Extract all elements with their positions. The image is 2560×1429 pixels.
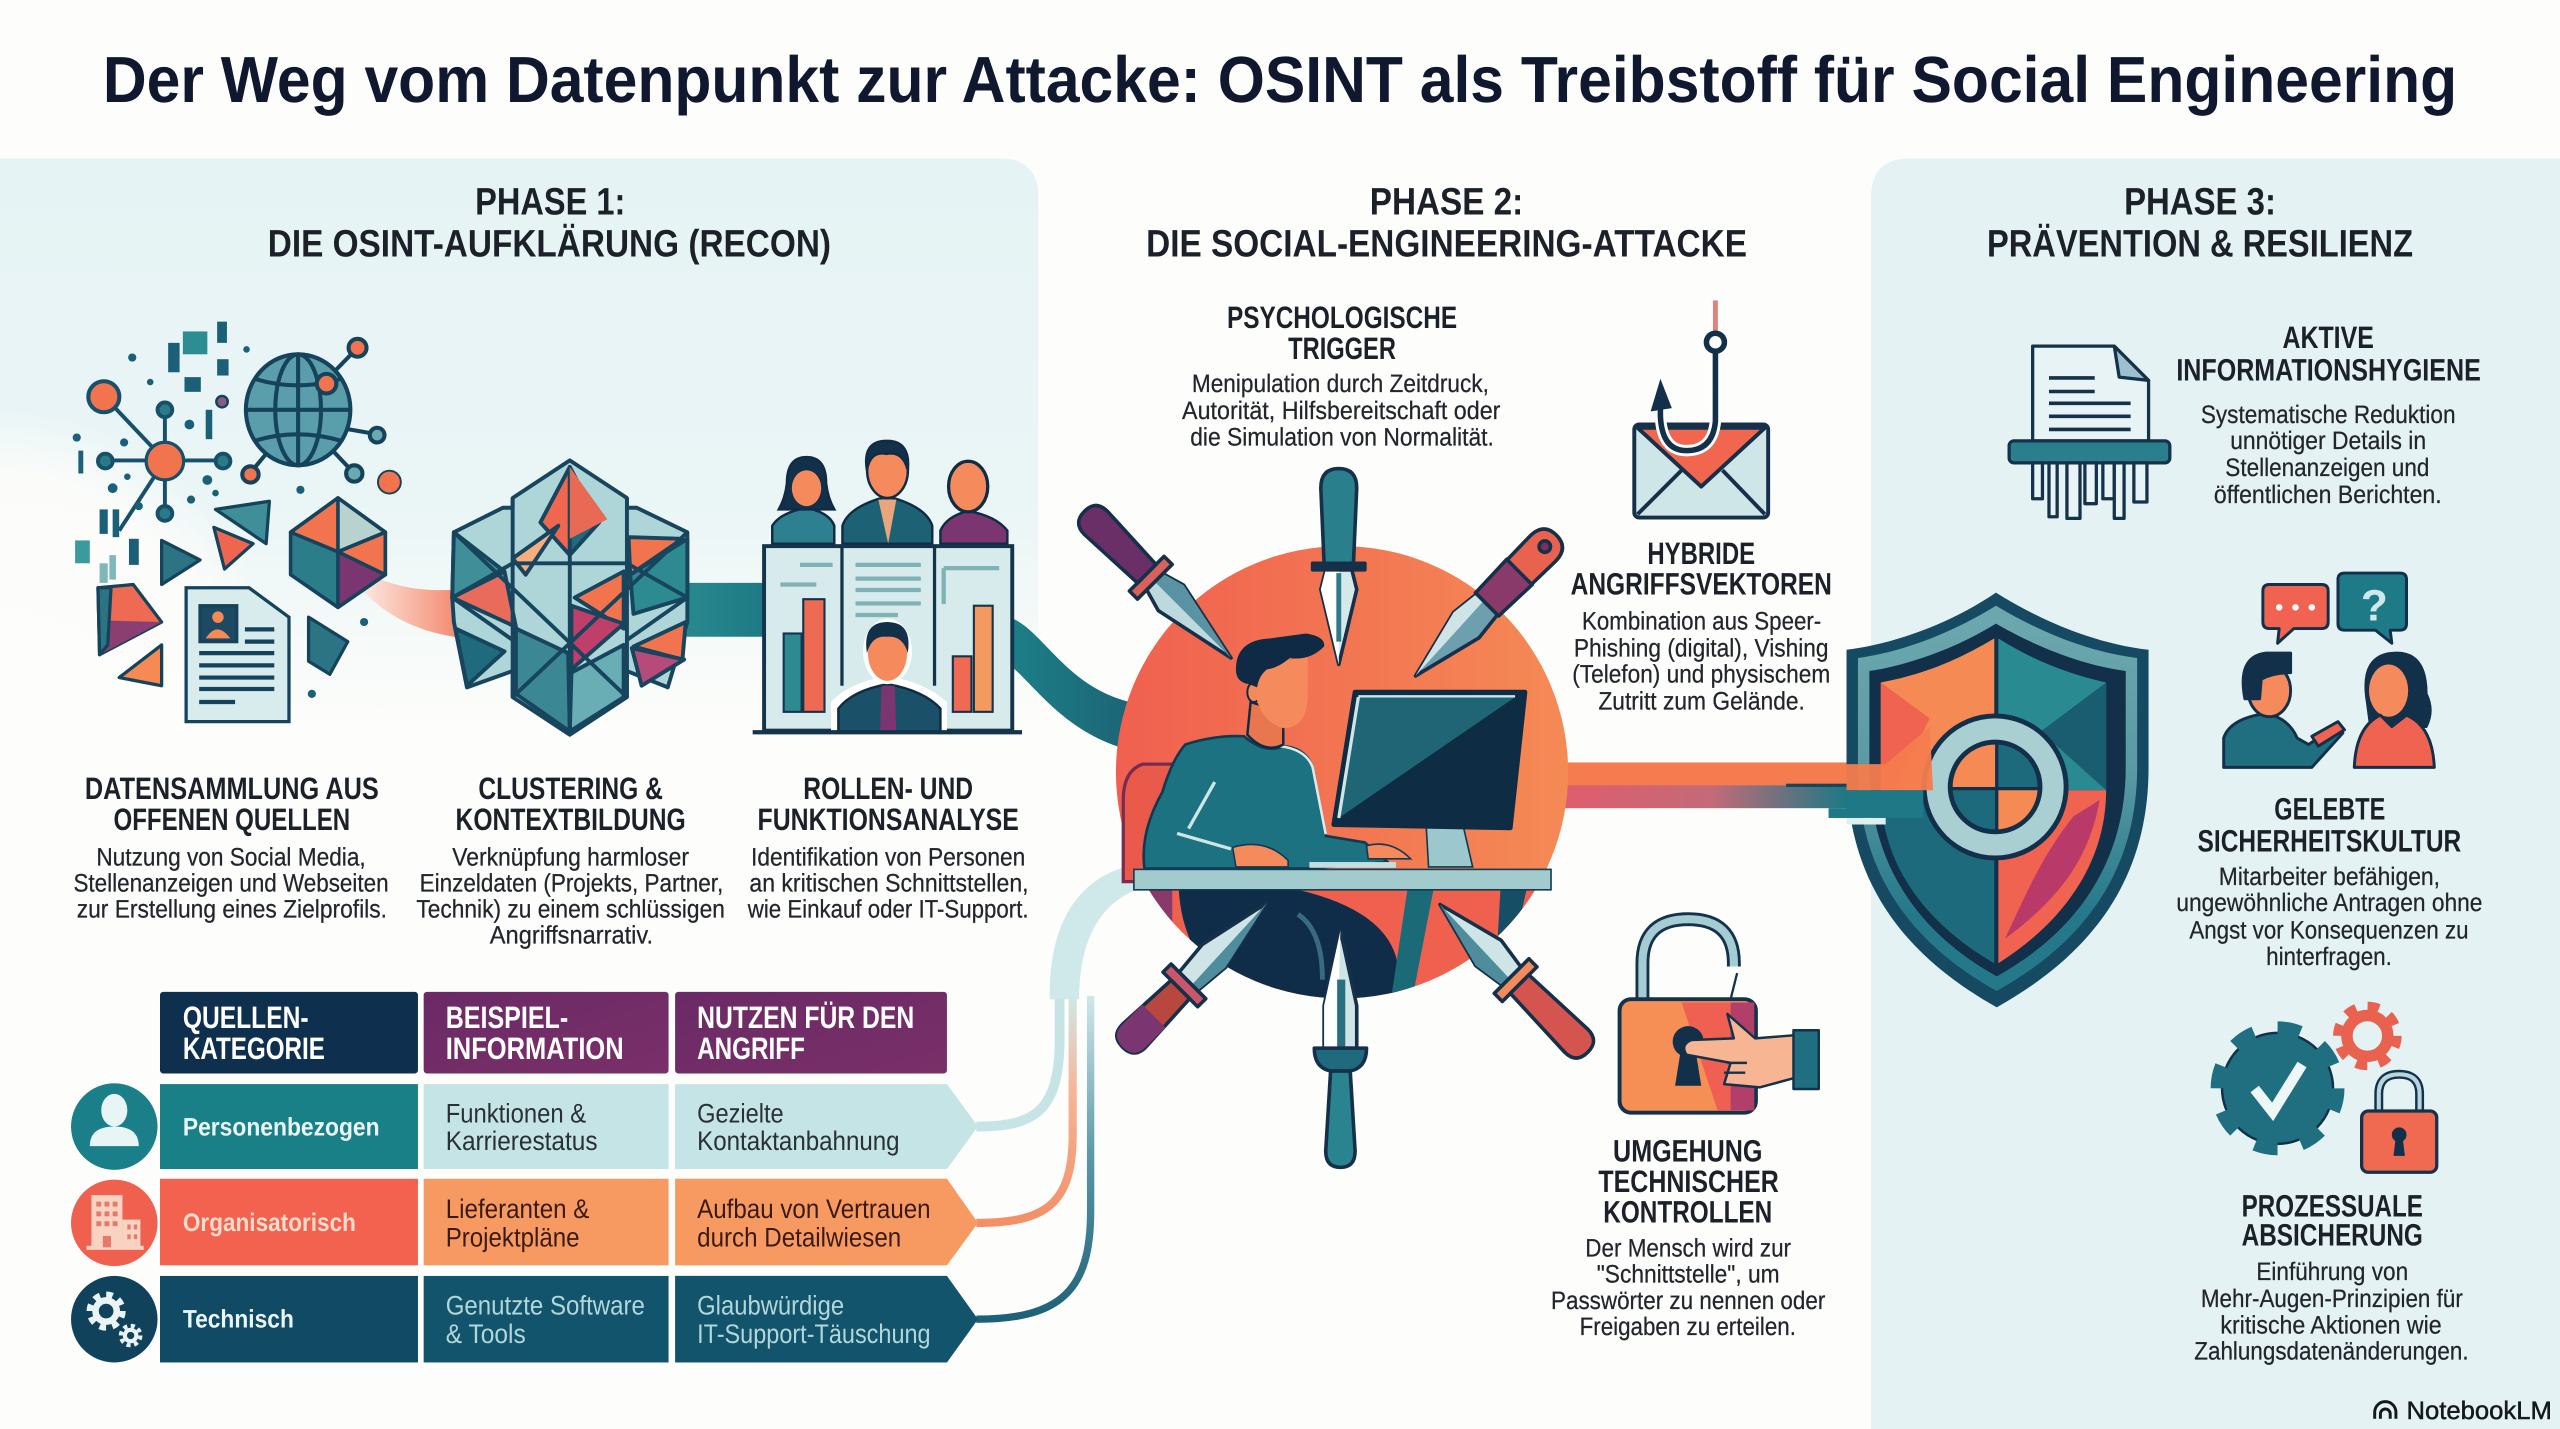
table header: INFORMATION xyxy=(446,1033,624,1067)
arrow: dark teal connector from table row 3 xyxy=(976,996,1091,1319)
envelope xyxy=(1634,424,1768,518)
text block: bypassing technical controls: "Schnittstelle", um xyxy=(1597,1261,1780,1289)
globe with satellites xyxy=(216,339,401,494)
icon: broken padlock with hand xyxy=(1620,919,1819,1113)
text block: process safeguards: ABSICHERUNG xyxy=(2242,1220,2423,1254)
text block: psychological triggers: Menipulation durch Zeitdruck, xyxy=(1192,371,1489,398)
text block: hybrid attack vectors: HYBRIDE xyxy=(1647,538,1755,572)
table header: ANGRIFF xyxy=(697,1033,805,1067)
text block: bypassing technical controls: KONTROLLEN xyxy=(1603,1196,1772,1231)
text block: clustering: Angriffsnarrativ. xyxy=(490,922,653,950)
network node graph xyxy=(88,381,230,531)
row: technical: Glaubwürdige xyxy=(697,1291,844,1321)
neck and head xyxy=(1236,633,1324,748)
heading: phase 1: PHASE 1: xyxy=(475,180,625,223)
icon: building xyxy=(87,1195,144,1250)
arrow: orange connector from table row 2 xyxy=(976,996,1073,1223)
table header: KATEGORIE xyxy=(183,1033,325,1067)
right top quadrant xyxy=(1998,638,2106,790)
icon: two people in conversation xyxy=(2224,573,2434,767)
row: technical xyxy=(71,1276,978,1362)
text block: data collection: OFFENEN QUELLEN xyxy=(113,804,350,838)
text block: security culture: hinterfragen. xyxy=(2266,944,2392,971)
arrow: light teal connector from table row 1 xyxy=(976,862,1156,1127)
icon: gears, check and lock xyxy=(2218,1007,2437,1172)
monitor xyxy=(1334,692,1525,828)
icon: scattered open source data xyxy=(73,322,401,722)
text block: role analysis: Identifikation von Personen xyxy=(751,844,1025,872)
text block: clustering: Einzeldaten (Projekts, Partner, xyxy=(420,870,723,898)
torso and arms xyxy=(1144,736,1388,869)
text block: bypassing technical controls xyxy=(1551,1136,1825,1342)
below-desk area xyxy=(1149,890,1535,998)
arrow: teal ribbon from clustering to role analysis xyxy=(673,583,771,637)
icon: crystalline clustering polyhedron xyxy=(452,460,687,735)
small lock xyxy=(2362,1074,2437,1172)
row: organisational xyxy=(71,1179,978,1266)
speech bubble: question: ? xyxy=(2361,581,2388,630)
text block: psychological triggers: die Simulation von Normalität. xyxy=(1190,424,1494,452)
text block: security culture xyxy=(2176,793,2482,971)
geometric fragments xyxy=(98,501,348,686)
text block: bypassing technical controls: Freigaben zu erteilen. xyxy=(1580,1314,1796,1342)
text block: bypassing technical controls: UMGEHUNG xyxy=(1613,1136,1762,1170)
icon: team and org board xyxy=(753,441,1022,732)
text block: role analysis: wie Einkauf oder IT-Support. xyxy=(746,896,1029,924)
table header xyxy=(160,992,947,1073)
text block: hybrid attack vectors: Kombination aus Speer- xyxy=(1582,608,1821,636)
row: organisational: Projektpläne xyxy=(446,1224,580,1253)
desk xyxy=(1134,869,1551,890)
panel: phase 3 background xyxy=(1871,158,2560,1429)
icon: phishing hook and envelope xyxy=(1634,300,1768,518)
heading: phase 2 xyxy=(1146,180,1747,264)
row: technical: Technisch xyxy=(183,1306,294,1334)
data pixels xyxy=(73,322,368,698)
text block: security culture: Angst vor Konsequenzen zu xyxy=(2189,917,2469,945)
row: person-related: Personenbezogen xyxy=(183,1114,380,1142)
text block: psychological triggers: PSYCHOLOGISCHE xyxy=(1227,302,1457,336)
text block: data collection: zur Erstellung eines Zielprofils. xyxy=(77,896,387,924)
text block: information hygiene: öffentlichen Berichten. xyxy=(2214,482,2442,509)
text block: role analysis: ROLLEN- UND xyxy=(803,773,973,807)
left top quadrant xyxy=(1881,638,1994,790)
row: organisational: Aufbau von Vertrauen xyxy=(697,1195,931,1225)
analysis board xyxy=(764,546,1012,731)
heading: phase 3: PHASE 3: xyxy=(2124,180,2276,223)
text block: bypassing technical controls: TECHNISCHER xyxy=(1598,1166,1779,1200)
icon: person xyxy=(90,1094,139,1146)
arrow: beam from attacker to shield xyxy=(1510,762,1935,818)
row: person-related xyxy=(71,1083,978,1170)
faceted hexagon xyxy=(291,498,385,607)
text block: information hygiene xyxy=(2176,322,2481,509)
row: organisational: Lieferanten & xyxy=(446,1195,589,1225)
profile document xyxy=(186,588,289,722)
heading: phase 3: PRÄVENTION & RESILIENZ xyxy=(1987,222,2413,264)
text block: hybrid attack vectors: Zutritt zum Gelände. xyxy=(1598,688,1805,716)
heading: phase 1 xyxy=(268,180,831,264)
row: person-related: Kontaktanbahnung xyxy=(697,1127,900,1157)
row: technical: Genutzte Software xyxy=(446,1291,645,1321)
woman xyxy=(2354,653,2434,767)
arrow: teal ribbon from role analysis to attacker xyxy=(1009,617,1151,754)
table header: QUELLEN- xyxy=(183,1002,309,1036)
icon: document shredder xyxy=(2009,346,2170,518)
illustration: attacker at desk in circle xyxy=(1115,546,1572,1004)
text block: process safeguards: Mehr-Augen-Prinzipien für xyxy=(2201,1286,2463,1314)
row: person-related: Karrierestatus xyxy=(446,1127,598,1157)
text block: clustering: KONTEXTBILDUNG xyxy=(456,804,686,838)
hands and keyboard xyxy=(1233,844,1411,868)
text block: data collection xyxy=(73,773,389,924)
icon: knife top center xyxy=(1313,469,1365,664)
heading: phase 1: DIE OSINT-AUFKLÄRUNG (RECON) xyxy=(268,222,831,264)
text block: security culture: SICHERHEITSKULTUR xyxy=(2198,825,2462,859)
text block: data collection: DATENSAMMLUNG AUS xyxy=(85,773,379,807)
text block: process safeguards xyxy=(2194,1190,2469,1366)
beam into ring xyxy=(1847,727,1933,790)
text block: clustering xyxy=(416,773,725,950)
icon: security shield xyxy=(1847,593,2149,1007)
icon: knife top left xyxy=(1067,494,1248,675)
text block: information hygiene: INFORMATIONSHYGIENE xyxy=(2176,354,2481,389)
text block: process safeguards: PROZESSUALE xyxy=(2242,1190,2423,1225)
heading: phase 2: DIE SOCIAL-ENGINEERING-ATTACKE xyxy=(1146,222,1747,264)
icon: knife top right xyxy=(1403,522,1569,689)
hook xyxy=(1660,333,1724,451)
row: person-related: Gezielte xyxy=(697,1100,784,1129)
text block: data collection: Stellenanzeigen und Webseiten xyxy=(73,870,389,898)
left bottom quadrant xyxy=(1881,790,1994,963)
text block: hybrid attack vectors: Phishing (digital), Vishing xyxy=(1574,635,1829,663)
text block: security culture: Mitarbeiter befähigen, xyxy=(2219,864,2440,891)
text block: information hygiene: AKTIVE xyxy=(2282,322,2374,356)
icon: knife bottom right xyxy=(1423,887,1605,1070)
text block: clustering: Technik) zu einem schlüssigen xyxy=(416,896,725,924)
table: source categories xyxy=(71,992,978,1362)
text block: role analysis: an kritischen Schnittstellen, xyxy=(749,870,1029,898)
text block: psychological triggers: TRIGGER xyxy=(1288,333,1396,367)
office chair xyxy=(1123,764,1174,882)
row: technical: & Tools xyxy=(446,1320,526,1349)
heading: phase 3 xyxy=(1987,180,2413,264)
heading: phase 2: PHASE 2: xyxy=(1370,180,1523,223)
text block: process safeguards: Einführung von xyxy=(2256,1259,2408,1287)
icon: gears xyxy=(90,1295,140,1345)
lead person xyxy=(831,676,947,731)
text block: psychological triggers: Autorität, Hilfsbereitschaft oder xyxy=(1182,398,1500,425)
text block: information hygiene: Systematische Reduktion xyxy=(2201,402,2456,429)
text block: clustering: CLUSTERING & xyxy=(478,773,663,807)
icon: knife bottom center xyxy=(1314,931,1367,1167)
text block: role analysis: FUNKTIONSANALYSE xyxy=(758,804,1019,838)
text block: bypassing technical controls: Passwörter zu nennen oder xyxy=(1551,1288,1825,1315)
right bottom quadrant xyxy=(1998,790,2106,963)
text block: hybrid attack vectors xyxy=(1571,538,1832,716)
row: organisational: durch Detailwiesen xyxy=(697,1224,901,1253)
text block: security culture: GELEBTE xyxy=(2274,793,2385,828)
text block: role analysis xyxy=(746,773,1029,924)
keyhole xyxy=(1673,1026,1704,1086)
central ring xyxy=(1922,713,2069,860)
large gear with check xyxy=(2218,1029,2337,1148)
icon: knife bottom left xyxy=(1105,886,1284,1064)
logo: NotebookLM: NotebookLM xyxy=(2407,1398,2552,1425)
text block: process safeguards: Zahlungsdatenänderungen. xyxy=(2194,1338,2469,1366)
speech bubble: question xyxy=(2338,573,2407,643)
speech bubble: dots xyxy=(2263,584,2328,643)
table header: NUTZEN FÜR DEN xyxy=(697,1000,914,1036)
three team members xyxy=(772,441,1007,544)
text block: information hygiene: Stellenanzeigen und xyxy=(2225,455,2429,483)
text block: hybrid attack vectors: ANGRIFFSVEKTOREN xyxy=(1571,568,1832,602)
text block: psychological triggers xyxy=(1182,302,1500,452)
monitor stand xyxy=(1424,782,1473,867)
text block: security culture: ungewöhnliche Antragen ohne xyxy=(2176,890,2482,918)
panel: phase 1 background xyxy=(0,158,1038,735)
row: person-related: Funktionen & xyxy=(446,1100,586,1129)
small gear xyxy=(2338,1007,2397,1065)
row: technical: IT-Support-Täuschung xyxy=(697,1320,931,1349)
arrow: orange ribbon from data collection to clustering xyxy=(362,571,482,640)
text block: data collection: Nutzung von Social Media, xyxy=(96,844,366,872)
board bars xyxy=(784,599,993,712)
text block: clustering: Verknüpfung harmloser xyxy=(452,844,689,872)
man xyxy=(2224,653,2344,767)
row: organisational: Organisatorisch xyxy=(183,1210,356,1238)
text block: information hygiene: unnötiger Details in xyxy=(2230,428,2426,456)
text block: hybrid attack vectors: (Telefon) und physischem xyxy=(1572,661,1830,689)
text block: process safeguards: kritische Aktionen wie xyxy=(2220,1312,2442,1340)
orange circle xyxy=(1116,546,1568,998)
table header: BEISPIEL- xyxy=(446,1002,568,1036)
hand xyxy=(1684,1014,1819,1089)
text block: bypassing technical controls: Der Mensch wird zur xyxy=(1585,1235,1791,1263)
